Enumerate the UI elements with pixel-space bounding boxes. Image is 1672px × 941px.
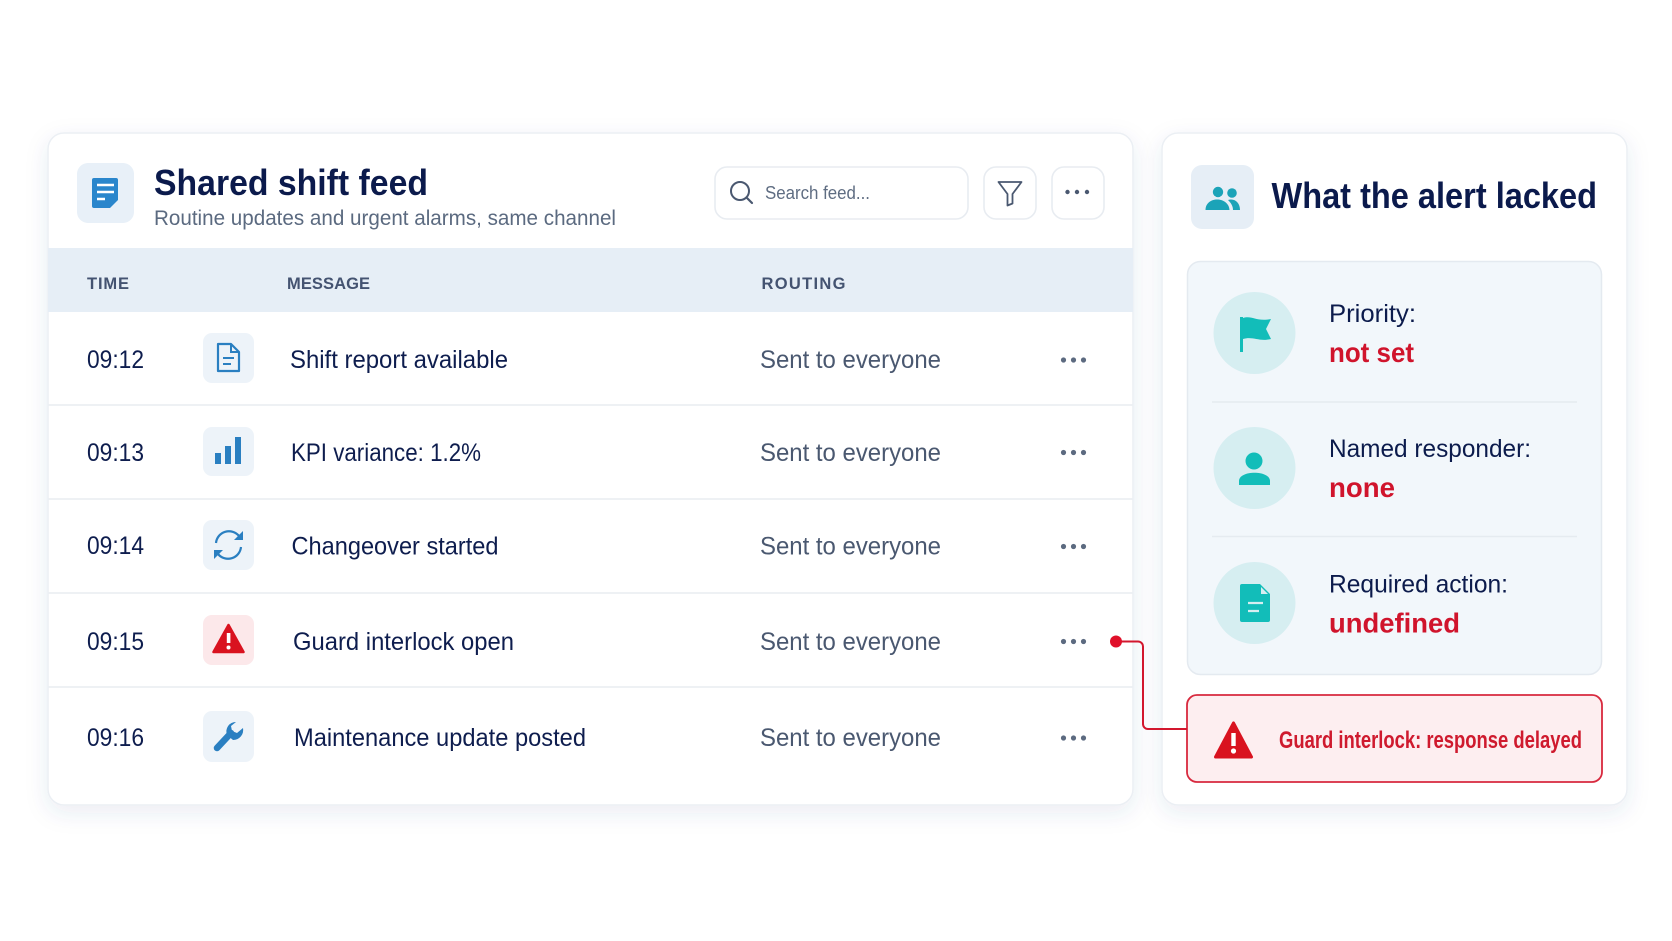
icon: refresh [203,520,254,570]
search box [715,167,968,219]
item: priority: Priority: [1329,300,1416,328]
filter button [984,167,1036,219]
row 09:15: Sent to everyone [760,628,941,656]
more button [1052,167,1104,219]
row 09:16: Sent to everyone [760,724,941,752]
row 09:12 [87,333,1086,383]
row 09:12: Sent to everyone [760,346,941,374]
callout: response delayed [1187,695,1602,782]
icon: wrench [203,711,254,762]
row 09:13 [87,427,1086,476]
panel: shared shift feed [48,133,1133,805]
item: priority: not set [1329,337,1414,368]
row 09:15: Guard interlock open [293,628,514,656]
table header: TIME [87,275,129,293]
row 09:16: 09:16 [87,724,144,752]
row 09:14 [87,520,1086,570]
item: named responder [1214,427,1531,509]
table header [48,248,1133,312]
icon: warning triangle [1216,723,1252,757]
row 09:12: Shift report available [290,346,508,374]
item: required action: undefined [1329,608,1460,638]
search box: Search feed... [765,183,870,203]
icon: feed document [77,163,134,223]
item: required action: Required action: [1329,570,1508,598]
row 09:14: 09:14 [87,532,144,560]
heading: what the alert lacked: What the alert lacked [1272,175,1597,216]
row 09:15: 09:15 [87,628,144,656]
row 09:13: 09:13 [87,439,144,467]
row 09:15 [87,615,1086,665]
item: required action [1214,562,1508,644]
subtitle: Routine updates and urgent alarms, same channel [154,207,616,230]
row 09:16: Maintenance update posted [294,724,586,752]
row 09:14: Sent to everyone [760,532,941,560]
row 09:16 [87,711,1086,762]
item: named responder: none [1329,472,1395,503]
row 09:13: KPI variance: 1.2% [291,439,481,467]
item: priority [1214,292,1416,374]
table header: ROUTING [762,275,846,293]
missing fields card [1188,262,1602,674]
row 09:14: Changeover started [292,532,498,560]
item: named responder: Named responder: [1329,435,1531,463]
callout: response delayed: Guard interlock: response delayed [1279,727,1582,754]
row 09:13: Sent to everyone [760,439,941,467]
icon: warning [203,615,254,665]
table header: MESSAGE [287,275,370,293]
heading: shared shift feed: Shared shift feed [154,162,428,203]
panel: what the alert lacked [1162,133,1627,805]
icon: bar chart [203,427,254,476]
icon: document [203,333,254,383]
arrow: connector from alarm row to callout [1110,636,1187,729]
row 09:12: 09:12 [87,346,144,374]
icon: people [1191,165,1254,229]
